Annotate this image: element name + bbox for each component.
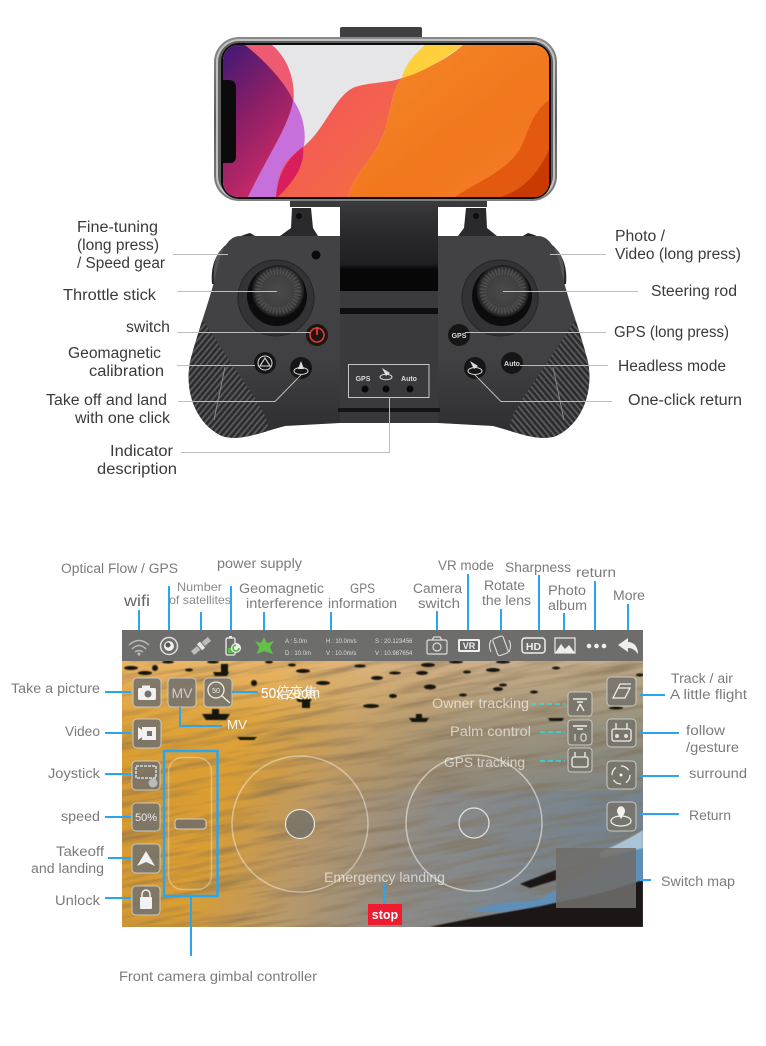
controller labels right: Headless mode bbox=[618, 358, 726, 375]
left app labels: Unlock bbox=[55, 893, 100, 908]
GPS readouts: A : 5.0m bbox=[285, 639, 307, 645]
MV button bbox=[168, 678, 196, 707]
controller labels right: One-click return bbox=[628, 392, 742, 409]
GPS readouts: D : 10.0m bbox=[285, 651, 311, 657]
right app labels: Track / air bbox=[671, 671, 734, 686]
top app labels: album bbox=[548, 598, 587, 613]
icon: battery bbox=[226, 636, 241, 655]
right virtual joystick bbox=[406, 755, 542, 891]
controller labels right: Photo / bbox=[615, 228, 666, 245]
top app labels: GPS bbox=[350, 581, 375, 596]
GPS button: GPS bbox=[452, 333, 467, 340]
takeoff button bbox=[290, 357, 312, 379]
labels on photo: Owner tracking bbox=[432, 695, 529, 711]
controller labels left: (long press) bbox=[77, 237, 159, 254]
stop button: stop bbox=[372, 908, 399, 922]
indicator panel: Auto bbox=[401, 376, 417, 383]
gimbal slider bbox=[164, 751, 218, 896]
shoreline bbox=[430, 830, 643, 927]
icon: more dots bbox=[587, 644, 606, 648]
icon: VR: VR bbox=[463, 641, 476, 651]
top app labels: interference bbox=[246, 596, 323, 611]
grip hatching bbox=[188, 320, 590, 438]
GPS readouts: S : 20.123456 bbox=[375, 639, 413, 645]
left app labels bbox=[11, 681, 104, 908]
app screen photo bbox=[122, 661, 643, 927]
phone in clamp bbox=[214, 27, 557, 207]
owner tracking button bbox=[568, 692, 592, 716]
right buttons bbox=[568, 677, 636, 831]
top app labels: the lens bbox=[482, 593, 531, 608]
controller bbox=[180, 206, 598, 445]
top app labels: switch bbox=[418, 596, 460, 611]
controller leader lines bbox=[173, 254, 638, 452]
auto button bbox=[501, 352, 523, 374]
labels on photo: 50x zoom bbox=[261, 685, 320, 702]
geomagnetic button bbox=[254, 352, 276, 374]
camera button bbox=[133, 678, 161, 707]
icon: optical flow bbox=[160, 638, 178, 654]
left joystick bbox=[238, 260, 314, 336]
controller labels left: Indicator bbox=[110, 443, 173, 460]
map thumbnail bbox=[556, 848, 636, 908]
left buttons bbox=[132, 678, 232, 915]
top app labels: return bbox=[576, 565, 616, 580]
indicator panel bbox=[348, 364, 429, 398]
GPS button bbox=[448, 324, 470, 346]
right app labels: follow bbox=[686, 723, 725, 738]
top app labels: Rotate bbox=[484, 578, 525, 593]
labels on photo: 50倍变焦 bbox=[261, 685, 317, 702]
GPS readouts: H : 10.0m/s bbox=[326, 639, 357, 645]
return button bbox=[607, 802, 636, 831]
top app labels: of satellites bbox=[169, 593, 231, 607]
left app labels: Video bbox=[65, 724, 100, 739]
right app labels: surround bbox=[689, 766, 747, 781]
lock button bbox=[132, 886, 160, 915]
return button bbox=[464, 357, 486, 379]
left virtual joystick bbox=[232, 756, 368, 892]
power button bbox=[306, 324, 328, 346]
top app labels: More bbox=[613, 588, 645, 603]
left app labels: and landing bbox=[31, 861, 104, 876]
icon: rotate lens bbox=[490, 635, 510, 656]
labels on photo: GPS tracking bbox=[444, 754, 525, 770]
top app labels: Camera bbox=[413, 581, 463, 596]
top app labels: Optical Flow / GPS bbox=[61, 561, 178, 576]
auto button: Auto bbox=[504, 361, 520, 368]
top app labels bbox=[61, 556, 645, 613]
blue callout lines bbox=[105, 574, 679, 956]
controller labels left: Geomagnetic bbox=[68, 345, 161, 362]
icon: VR bbox=[458, 639, 480, 652]
right app labels: /gesture bbox=[686, 740, 739, 755]
icon: album bbox=[555, 638, 575, 653]
left app labels: Takeoff bbox=[56, 844, 104, 859]
boats bbox=[124, 660, 644, 740]
MV button: MV bbox=[172, 685, 193, 701]
palm control button bbox=[568, 720, 592, 745]
surround button bbox=[607, 761, 636, 789]
right app labels: Return bbox=[689, 808, 731, 823]
zoom button: 50 bbox=[212, 688, 220, 695]
GPS readouts: V : 10.0m/s bbox=[326, 651, 356, 657]
icon: satellite bbox=[190, 636, 212, 656]
takeoff button bbox=[132, 844, 160, 873]
top app labels: information bbox=[328, 596, 397, 611]
icon: return arrow bbox=[618, 638, 638, 654]
joystick overlays bbox=[164, 751, 542, 925]
top app labels: VR mode bbox=[438, 558, 494, 573]
top app labels: Photo bbox=[548, 583, 586, 598]
top app labels: wifi bbox=[123, 593, 150, 610]
video button bbox=[133, 719, 161, 748]
controller labels left: Throttle stick bbox=[63, 287, 156, 304]
follow button bbox=[607, 719, 636, 747]
controller labels right bbox=[614, 228, 742, 409]
gimbal caption: Front camera gimbal controller bbox=[119, 968, 317, 984]
joystick button bbox=[132, 761, 160, 790]
right app labels: A little flight bbox=[670, 687, 747, 702]
controller labels left: description bbox=[97, 461, 177, 478]
labels on photo: Emergency landing bbox=[324, 869, 445, 885]
top app labels: Sharpness bbox=[505, 560, 571, 575]
right joystick bbox=[462, 260, 538, 336]
GPS readouts: V : 10.987654 bbox=[375, 651, 413, 657]
controller labels left: calibration bbox=[89, 363, 164, 380]
controller labels right: Steering rod bbox=[651, 283, 737, 300]
left app labels: Joystick bbox=[48, 766, 100, 781]
GPS readouts bbox=[285, 639, 413, 657]
left app labels: speed bbox=[61, 809, 100, 824]
controller labels left: with one click bbox=[74, 410, 170, 427]
speed button: 50% bbox=[135, 812, 157, 824]
controller labels left: switch bbox=[126, 319, 170, 336]
centre column bbox=[338, 206, 440, 423]
icon: camera switch bbox=[427, 637, 447, 654]
indicator panel: GPS bbox=[356, 376, 371, 383]
controller labels left bbox=[46, 219, 177, 478]
stop button bbox=[368, 904, 402, 925]
top app labels: Number bbox=[177, 580, 222, 594]
track button bbox=[607, 677, 636, 706]
top app labels: Geomagnetic bbox=[239, 581, 324, 596]
top app labels: power supply bbox=[217, 556, 302, 571]
controller labels left: Take off and land bbox=[46, 392, 167, 409]
icon: HD: HD bbox=[526, 641, 541, 653]
icon: geomagnetic star bbox=[255, 637, 274, 654]
controller labels left: Fine-tuning bbox=[77, 219, 158, 236]
GPS tracking button bbox=[568, 748, 592, 772]
controller labels right: Video (long press) bbox=[615, 246, 741, 263]
controller labels left: / Speed gear bbox=[77, 255, 165, 272]
speed button bbox=[132, 803, 160, 831]
right app labels bbox=[661, 671, 747, 889]
zoom button bbox=[204, 678, 232, 707]
right app labels: Switch map bbox=[661, 874, 735, 889]
status bar bbox=[122, 630, 643, 661]
icon: wifi bbox=[129, 640, 149, 655]
labels on photo bbox=[227, 685, 531, 885]
labels on photo: MV bbox=[227, 717, 247, 732]
labels on photo: Palm control bbox=[450, 723, 531, 739]
controller labels right: GPS (long press) bbox=[614, 324, 729, 341]
icon: HD bbox=[522, 638, 545, 653]
left app labels: Take a picture bbox=[11, 681, 100, 696]
